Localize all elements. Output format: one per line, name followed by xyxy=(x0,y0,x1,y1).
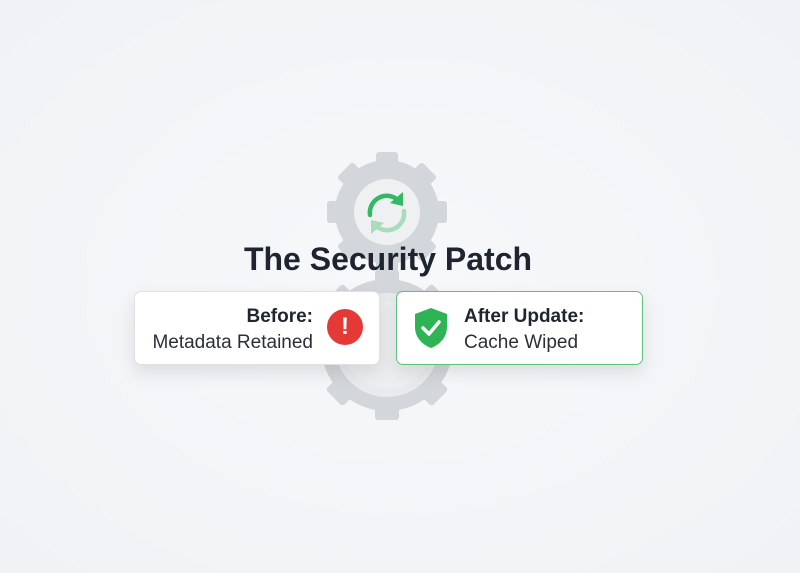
icon: red alert: ! xyxy=(341,313,349,340)
icon: red alert xyxy=(327,309,363,345)
card: before: Metadata Retained xyxy=(152,332,313,353)
icon: green shield xyxy=(415,308,447,348)
title: The Security Patch xyxy=(244,241,532,277)
card: after: After Update: xyxy=(464,306,584,327)
card: after xyxy=(396,291,643,365)
card: before: Before: xyxy=(246,306,313,327)
card: before xyxy=(134,291,380,365)
icon: sync arrows xyxy=(368,192,406,234)
card: after: Cache Wiped xyxy=(464,332,578,353)
